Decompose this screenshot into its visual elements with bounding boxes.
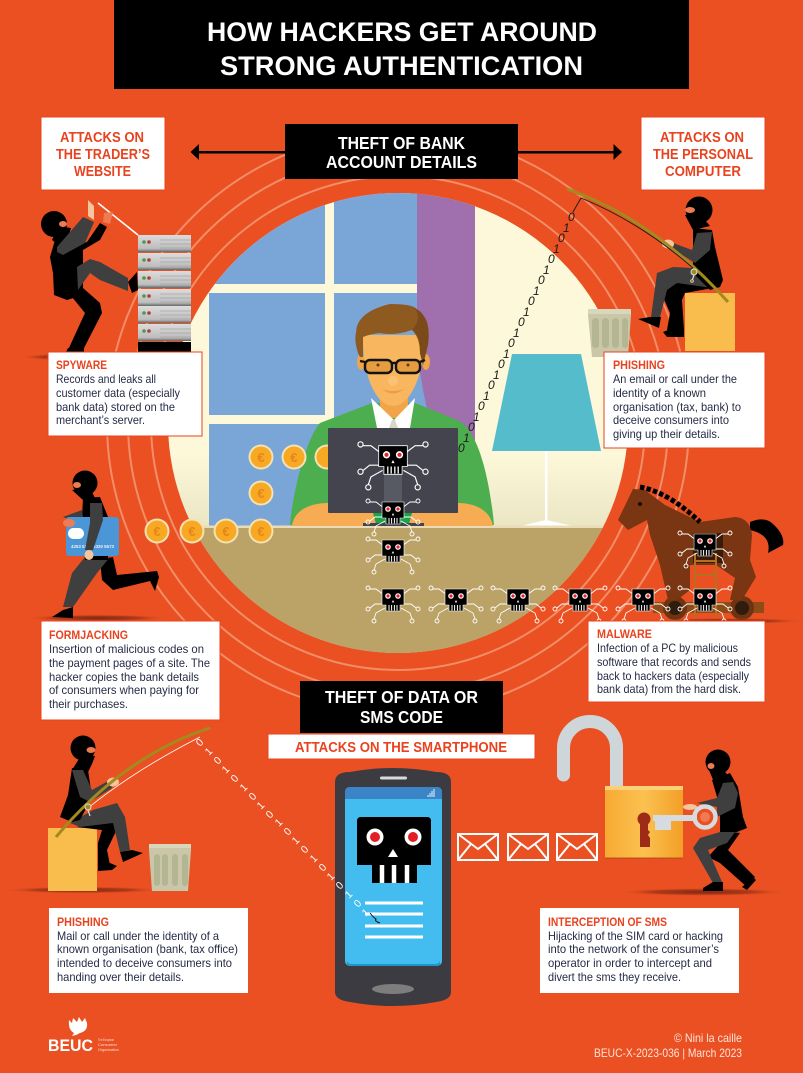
nose and mouth [388,376,398,386]
tail [750,519,783,553]
heading: attacks on the trader's website: THE TRADER’S [56,147,150,163]
envelopes [458,834,597,860]
title: STRONG AUTHENTICATION [220,51,583,81]
skull trail: malware spreading [366,499,732,623]
server stack [138,235,191,352]
fishing rod [567,189,728,302]
sweater [290,403,494,525]
bottom box seat [48,828,97,891]
panel: formjacking: the payment pages of a site. The [49,656,210,670]
panel: phishing personal computer: giving up their details. [613,427,720,441]
heading: theft of bank account details: ACCOUNT DETAILS [326,152,477,172]
hacker running with bank card [52,470,159,618]
panel: phishing smartphone: handing over their details. [57,970,184,984]
heading: theft of bank account details [285,124,518,179]
heading: theft of data or sms code: SMS CODE [360,707,443,727]
panel: phishing smartphone: Mail or call under the identity of a [57,929,219,943]
panel: malware: bank data) from the hard disk. [597,682,741,696]
heading: attacks on the smartphone [268,734,535,759]
hacker fishing from the smartphone [56,728,210,871]
panel: interception of sms: INTERCEPTION OF SMS [548,915,667,929]
arrow left [190,144,286,160]
body [618,489,756,600]
central scene: room with window, lamp and table [160,190,640,670]
heading: attacks on the personal computer [641,117,765,190]
skull on laptop screen [358,442,428,490]
panel: spyware [48,352,202,436]
fishing rod [56,728,210,837]
panel: interception of sms: divert the sms they receive. [548,970,681,984]
lamp [492,354,601,527]
coins [144,444,306,544]
logo: BEUC [48,1017,119,1055]
panel: phishing personal computer: identity of a known [613,386,706,400]
message lines [365,903,423,937]
panel: phishing personal computer [604,352,765,448]
panel: formjacking: Insertion of malicious codes on [49,642,204,656]
footer credits: BEUC-X-2023-036 | March 2023 [594,1046,742,1060]
panel: formjacking: of consumers when paying for [49,683,199,697]
heading: attacks on the trader's website: WEBSITE [74,164,131,180]
heading: theft of bank account details: THEFT OF BANK [338,133,465,153]
binary stream to the personal computer: 01010101010101010101010 [458,210,575,455]
panel: malware: software that records and sends [597,655,751,669]
neck and collar [380,390,408,418]
footer credits [594,1031,742,1060]
panel: phishing personal computer: PHISHING [613,358,665,372]
panel: spyware: customer data (especially [56,386,180,400]
man at laptop [290,304,494,526]
logo: BEUC: Organisation [98,1048,119,1052]
ears and face [357,354,365,370]
binary stream to the smartphone: 01010101010101010101 [194,736,372,919]
panel: formjacking: FORMJACKING [49,628,128,642]
coin overlapping sweater [314,444,340,470]
heading: attacks on the smartphone: ATTACKS ON THE SMARTPHONE [295,740,507,756]
concentric rings [107,132,689,714]
skull on screen [357,817,431,883]
coins: € [188,524,196,539]
smartphone [335,768,451,1006]
panel: spyware: SPYWARE [56,358,107,372]
coins: € [153,524,161,539]
heading: theft of data or sms code: THEFT OF DATA OR [325,687,478,707]
shadow under lock hacker [618,888,788,896]
panel: phishing personal computer: organisation (tax, bank) to [613,400,741,414]
hair [355,304,428,365]
coins: € [257,450,265,465]
panel: spyware: Records and leaks all [56,372,156,386]
panel: phishing smartphone [49,908,248,993]
trash can [588,309,631,357]
panel: interception of sms: operator in order to intercept and [548,956,712,970]
panel: malware [588,621,765,702]
panel: interception of sms: into the network of the consumer’s [548,942,719,956]
panel: malware: back to hackers data (especially [597,669,749,683]
panel: formjacking [41,621,220,720]
arrow right [517,144,622,160]
mane [640,487,700,522]
shadow under server hacker [20,354,120,360]
open padlock [564,722,683,859]
box seat [685,293,735,351]
logo: BEUC: BEUC [48,1037,93,1055]
footer credits: © Nini la caille [674,1031,742,1045]
panel: phishing personal computer: deceive consumers into [613,413,729,427]
bank card [66,517,119,556]
logo: BEUC: The European [98,1038,114,1042]
panel: phishing personal computer: An email or call under the [613,372,737,386]
heading: attacks on the trader's website: ATTACKS ON [60,130,144,146]
shadow under runner [25,614,169,622]
curtain [417,190,475,462]
heading: attacks on the personal computer: COMPUTER [665,164,741,180]
panel: malware: Infection of a PC by malicious [597,641,738,655]
screen [345,787,442,966]
coins: € [257,524,265,539]
coins: € [290,450,298,465]
title [114,0,689,89]
panel: spyware: merchant’s server. [56,413,145,427]
shadow under bottom fishing hacker [3,886,163,894]
crowbar [98,203,138,235]
heading: attacks on the personal computer: ATTACKS ON [660,130,744,146]
title: HOW HACKERS GET AROUND [207,17,597,47]
shadow under fishing hacker [602,354,778,360]
panel: interception of sms: Hijacking of the SIM card or hacking [548,929,723,943]
logo: BEUC: Consumer [98,1043,118,1047]
coins: € [257,486,265,501]
laptop [328,428,458,526]
heading: theft of data or sms code [300,681,503,733]
forearms [292,503,493,526]
hacker picking the lock [653,750,756,891]
heading: attacks on the trader's website [41,117,165,190]
panel: formjacking: their purchases. [49,697,128,711]
panel: interception of sms [540,908,739,993]
panel: phishing smartphone: PHISHING [57,915,109,929]
window panes [209,193,427,526]
heading: attacks on the personal computer: THE PERSONAL [653,147,753,163]
key [653,806,716,830]
bank card: 4253 5155 6330 5573 [71,544,114,549]
hacker climbing the server [41,200,138,352]
coins: € [222,524,230,539]
glasses [360,360,425,373]
bottom trash can [149,844,191,891]
panel: malware: MALWARE [597,627,652,641]
ladder [695,553,716,618]
panel: phishing smartphone: known organisation (bank, tax office) [57,942,238,956]
wheels and platform [653,602,764,613]
trojan horse [618,487,783,620]
hacker fishing from the personal computer [567,189,728,337]
table [200,526,604,653]
panel: formjacking: hacker copies the bank details [49,670,199,684]
panel: phishing smartphone: intended to deceive consumers into [57,956,232,970]
panel: spyware: bank data) stored on the [56,400,175,414]
shadow under trojan horse [647,618,803,624]
